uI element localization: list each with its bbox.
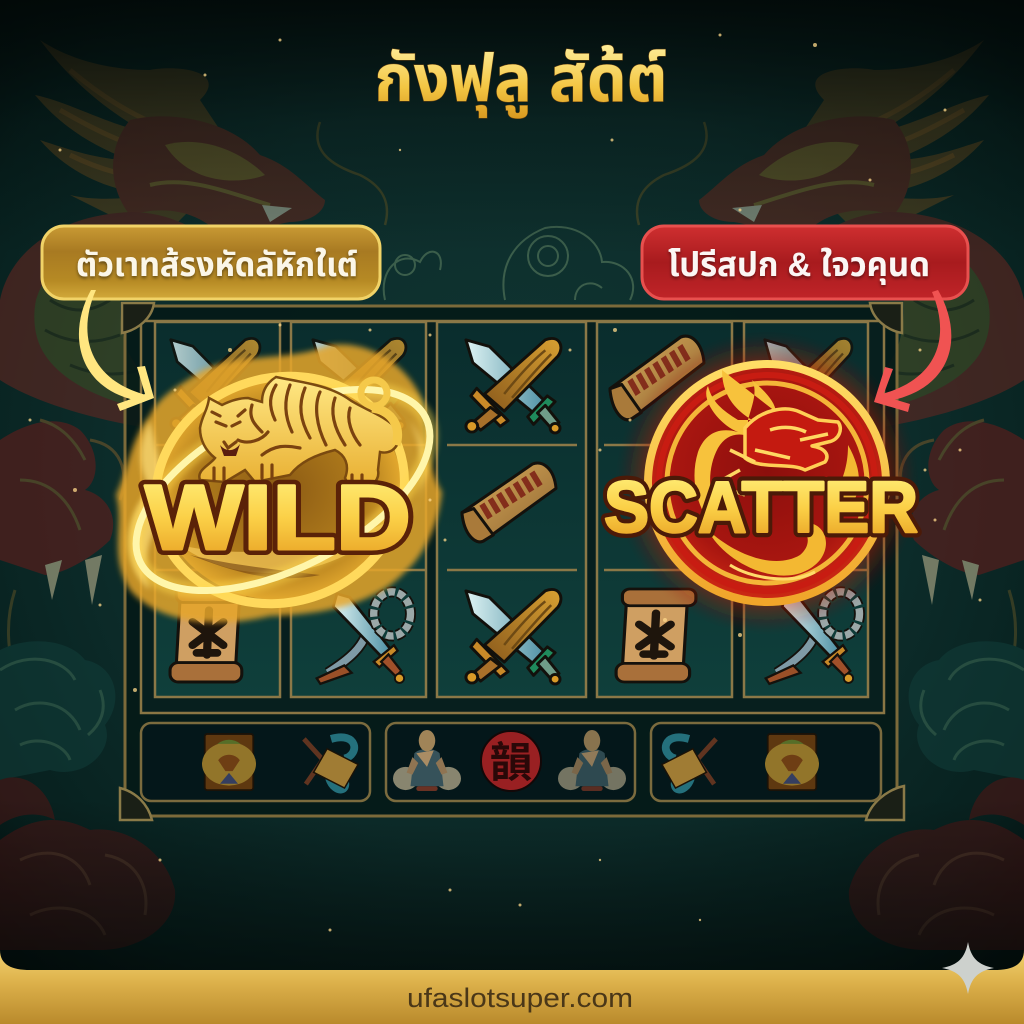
SCATTER text: SCATTER — [604, 468, 918, 548]
icon: jar — [202, 734, 256, 790]
symbol: tablet col 4 — [610, 336, 704, 420]
callout: wild label: ตัวเาทส้รงหัดลัหักใเต์ — [76, 246, 358, 284]
WILD emblem — [105, 342, 461, 638]
lower right panel — [651, 723, 881, 801]
wild core disc — [158, 380, 402, 600]
arrow: scatter — [874, 290, 951, 412]
symbol: tablet col 3 — [462, 463, 556, 542]
icon: red seal — [481, 729, 541, 791]
symbol: crossed swords col 3 top — [466, 338, 561, 433]
symbol: banner col 4 — [616, 589, 696, 682]
background: left dragon — [0, 40, 387, 950]
icon: lock — [304, 737, 358, 790]
symbol: crossed swords col 1 — [171, 338, 260, 430]
footer text: ufaslotsuper.com — [407, 983, 633, 1013]
reel cells — [155, 322, 868, 697]
icon: red seal: 韻 — [490, 729, 532, 790]
symbol: crossed swords col 5 — [765, 338, 852, 430]
SCATTER text: SCATTER — [604, 468, 918, 548]
tiger — [199, 377, 399, 488]
symbol: crossed swords col 3 bottom — [466, 589, 561, 684]
corner ornaments — [120, 303, 904, 820]
reels area — [141, 321, 884, 713]
symbol: banner col 1 — [170, 585, 248, 682]
WILD text: WILD — [145, 467, 411, 569]
callout: scatter label: โปรีสปก & ใจวคุนด — [668, 246, 930, 285]
callout: wild label — [42, 226, 380, 299]
icon: jar — [765, 734, 819, 790]
icon: lock — [662, 737, 716, 790]
icon: monk right — [558, 730, 626, 791]
slot machine board — [120, 303, 904, 820]
title: กังฟุลู สัด้ต์ — [374, 41, 668, 118]
scatter medallion — [648, 364, 886, 602]
WILD text: WILD — [145, 467, 411, 569]
symbol: chain sword col 5 — [766, 592, 860, 684]
wild flames — [116, 344, 442, 622]
symbol: chain sword col 2 — [317, 592, 411, 684]
background: cloud outlines — [384, 227, 633, 300]
lower left panel — [141, 723, 370, 801]
icon: monk left — [393, 730, 461, 791]
lower centre panel — [386, 723, 635, 801]
board frame — [125, 306, 897, 816]
footer bar — [0, 950, 1024, 1024]
background: right dragon — [637, 40, 1024, 950]
arrow: wild — [79, 290, 154, 411]
scatter dragon — [694, 370, 859, 579]
symbol: crossed swords col 2 — [313, 338, 406, 430]
callout: scatter label — [642, 226, 968, 299]
icon: sparkle star — [942, 942, 994, 994]
SCATTER emblem — [604, 333, 918, 633]
wild orbit rings — [105, 342, 461, 638]
scatter glow — [617, 333, 917, 633]
